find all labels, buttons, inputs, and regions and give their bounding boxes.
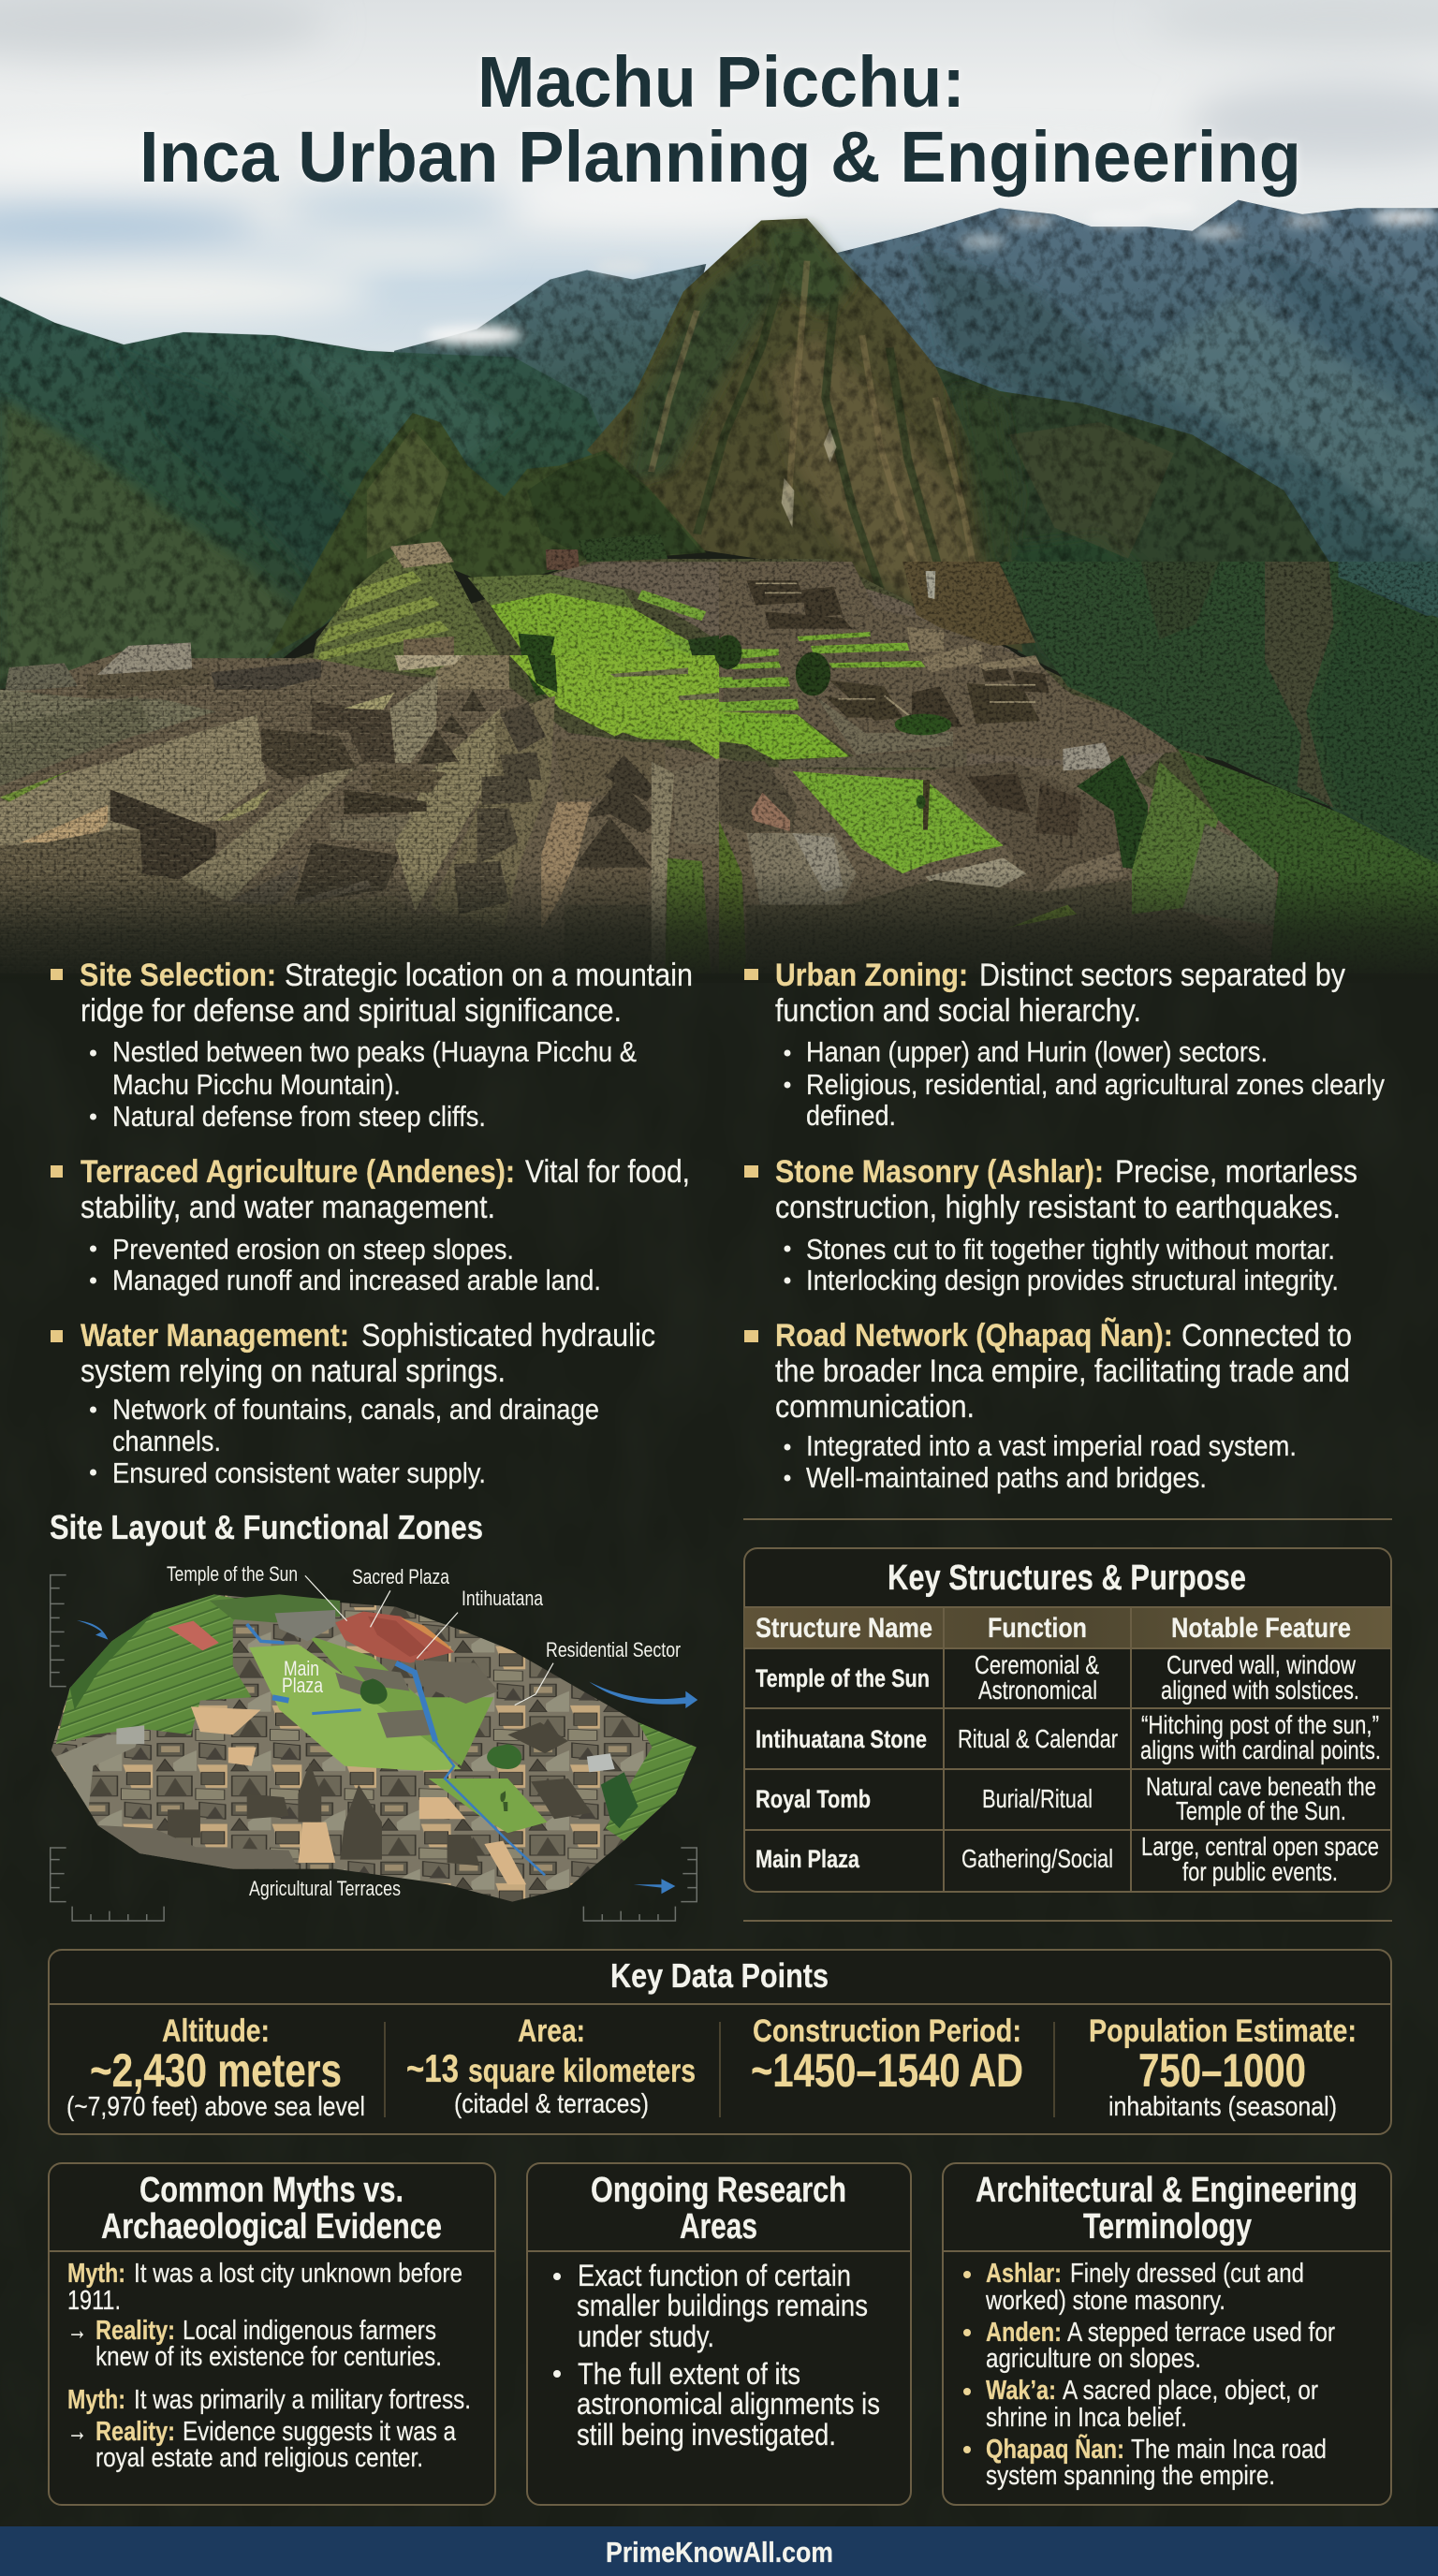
panel: ongoing research areas (527, 2163, 911, 2505)
row: temple of the sun: aligned with solstices. (1161, 1676, 1359, 1705)
research item two (553, 2357, 880, 2452)
point: water management: Network of fountains, canals, and drainage (112, 1393, 599, 1426)
term: waka: shrine in Inca belief. (986, 2403, 1187, 2433)
point: terraced agriculture: Vital for food, (525, 1154, 690, 1190)
point: water management: channels. (112, 1425, 221, 1457)
myth one: Myth: (67, 2259, 125, 2289)
table: key structures and purpose (743, 1519, 1392, 1921)
panel: key data points (49, 1950, 1391, 2134)
point: urban zoning (744, 958, 1385, 1132)
photo fade into dark panel (0, 871, 1438, 983)
site layout map illustration (51, 1562, 697, 1921)
panel: common myths vs archaeological evidence (49, 2163, 495, 2505)
term: anden: A stepped terrace used for (1067, 2318, 1335, 2348)
research item one: smaller buildings remains (577, 2289, 868, 2322)
title (139, 42, 1301, 198)
point: site selection: Natural defense from steep cliffs. (112, 1100, 486, 1133)
term: anden: agriculture on slopes. (986, 2344, 1201, 2374)
term: qhapaq nan: system spanning the empire. (986, 2461, 1275, 2491)
stat: altitude: ~2,430 meters (90, 2044, 342, 2097)
stat: construction period (751, 2013, 1023, 2097)
point: terraced agriculture: Managed runoff and increased arable land. (112, 1264, 601, 1296)
research item two: The full extent of its (578, 2357, 800, 2391)
point: stone masonry: construction, highly resistant to earthquakes. (775, 1190, 1341, 1225)
myth one: It was a lost city unknown before (134, 2259, 462, 2289)
point: urban zoning: Hanan (upper) and Hurin (lower) sectors. (806, 1035, 1268, 1068)
point: road network: the broader Inca empire, facilitating trade and (775, 1354, 1350, 1389)
point: road network: Road Network (Qhapaq Ñan): (775, 1318, 1173, 1354)
point: site selection: Machu Picchu Mountain). (112, 1068, 401, 1101)
point: road network: Connected to (1181, 1318, 1352, 1354)
row: main plaza (756, 1832, 1379, 1886)
term: waka (963, 2376, 1318, 2433)
panel heading (591, 2171, 846, 2247)
myth two (67, 2385, 471, 2473)
point: urban zoning: defined. (806, 1099, 896, 1132)
myth two: Evidence suggests it was a (183, 2417, 457, 2447)
row: main plaza: for public events. (1182, 1857, 1338, 1886)
table title: Key Structures & Purpose (888, 1559, 1246, 1598)
myth two: It was primarily a military fortress. (134, 2385, 471, 2415)
point: water management (51, 1318, 655, 1489)
panel heading: Architectural & Engineering (976, 2171, 1357, 2210)
point: water management: system relying on natural springs. (81, 1354, 506, 1389)
leader lines (305, 1575, 553, 1705)
research item one: Exact function of certain (578, 2259, 851, 2292)
flow arrows (77, 1620, 697, 1894)
panel heading (976, 2171, 1357, 2247)
term: ashlar (963, 2259, 1304, 2316)
point: road network (744, 1318, 1352, 1494)
term: anden (963, 2318, 1335, 2374)
citadel ruins (0, 534, 1438, 973)
water channels (247, 1624, 545, 1875)
point: stone masonry: Stone Masonry (Ashlar): (775, 1154, 1104, 1190)
row: intihuatana stone: aligns with cardinal points. (1140, 1735, 1381, 1764)
panel heading: Common Myths vs. (139, 2171, 404, 2210)
research item two: still being investigated. (577, 2418, 836, 2452)
term: ashlar: worked) stone masonry. (985, 2286, 1225, 2316)
term: ashlar: Finely dressed (cut and (1070, 2259, 1304, 2289)
ridge-top clouds (424, 201, 1438, 344)
myth two: Myth: (67, 2385, 125, 2415)
point: site selection: Strategic location on a mountain (285, 958, 693, 993)
point: terraced agriculture: stability, and water management. (81, 1190, 495, 1225)
table header row: Notable Feature (1171, 1613, 1351, 1644)
stat: population estimate: inhabitants (seasonal) (1108, 2092, 1337, 2122)
map base landform (51, 1594, 697, 1902)
point: urban zoning: function and social hierarchy. (775, 993, 1141, 1029)
table header row (756, 1613, 1351, 1644)
left column: key points (51, 958, 693, 1489)
point: road network: Integrated into a vast imperial road system. (806, 1429, 1297, 1462)
term: qhapaq nan: Qhapaq Ñan: (986, 2433, 1124, 2465)
point: terraced agriculture (51, 1154, 690, 1296)
term: ashlar: Ashlar: (986, 2259, 1062, 2289)
stat: altitude: (~7,970 feet) above sea level (66, 2092, 365, 2122)
stat: altitude (66, 2013, 365, 2122)
row: royal tomb: Natural cave beneath the (1146, 1772, 1376, 1801)
point: stone masonry: Stones cut to fit together tightly without mortar. (806, 1233, 1335, 1266)
row: main plaza: Main Plaza (756, 1845, 860, 1873)
forest and terraces (56, 1594, 697, 1841)
right column: key points (744, 958, 1385, 1494)
myth one: → (67, 2316, 87, 2346)
point: road network: Well-maintained paths and bridges. (806, 1461, 1207, 1494)
table header row: Function (988, 1613, 1087, 1644)
research item two: astronomical alignments is (577, 2387, 880, 2421)
panel title: Key Data Points (610, 1956, 829, 1995)
myth one: Local indigenous farmers (183, 2316, 436, 2346)
stat: area: (citadel & terraces) (454, 2089, 649, 2119)
stat: area: ~13 (406, 2046, 459, 2090)
row: temple of the sun: Ceremonial & (975, 1650, 1099, 1679)
row: royal tomb: Royal Tomb (756, 1785, 871, 1813)
stat: area: square kilometers (468, 2053, 696, 2089)
sky and clouds (0, 0, 1438, 393)
point: urban zoning: Urban Zoning: (775, 958, 968, 993)
scale rulers (51, 1575, 697, 1921)
main plaza (249, 1645, 462, 1771)
upper terraces (307, 1635, 493, 1766)
myth one: 1911. (67, 2286, 121, 2316)
stat: area: Area: (518, 2013, 585, 2049)
point: stone masonry: Precise, mortarless (1115, 1154, 1357, 1190)
row: intihuatana stone: Ritual & Calendar (958, 1724, 1118, 1753)
row: main plaza: Large, central open space (1141, 1832, 1379, 1861)
term: qhapaq nan (963, 2433, 1327, 2491)
panel heading: Ongoing Research (591, 2171, 846, 2210)
table header row: Structure Name (756, 1613, 932, 1644)
footer band: PrimeKnowAll.com (606, 2536, 833, 2569)
stat: construction period: ~1450–1540 AD (751, 2044, 1023, 2097)
point: water management: Ensured consistent water supply. (112, 1456, 486, 1489)
stat: population estimate: 750–1000 (1138, 2044, 1306, 2097)
gullies on the main peak (697, 248, 954, 621)
residential buildings (415, 1660, 498, 1704)
heading: site layout: Site Layout & Functional Zones (50, 1508, 483, 1546)
panel heading: Terminology (1083, 2207, 1252, 2247)
myth two: Reality: (95, 2417, 175, 2447)
point: stone masonry: Interlocking design provides structural integrity. (806, 1264, 1339, 1296)
row: intihuatana stone: Intihuatana Stone (756, 1725, 927, 1753)
map labels: Temple of the Sun (167, 1562, 298, 1586)
point: water management: Water Management: (81, 1318, 349, 1354)
mountains (0, 200, 1438, 894)
myth one: Reality: (95, 2316, 175, 2346)
point: site selection: ridge for defense and spiritual significance. (81, 993, 622, 1029)
myth one (67, 2259, 462, 2372)
myth two: royal estate and religious center. (95, 2443, 423, 2473)
myth two: → (67, 2417, 87, 2447)
row: temple of the sun (756, 1650, 1359, 1705)
title: Inca Urban Planning & Engineering (139, 117, 1301, 198)
point: terraced agriculture: Prevented erosion on steep slopes. (112, 1233, 514, 1266)
point: site selection: Nestled between two peaks (Huayna Picchu & (112, 1035, 637, 1068)
panel heading: Archaeological Evidence (101, 2207, 442, 2247)
point: site selection (51, 958, 693, 1133)
map labels: Sacred Plaza (352, 1565, 450, 1588)
term: anden: Anden: (986, 2318, 1062, 2348)
term: waka: Wak’a: (986, 2376, 1056, 2406)
point: stone masonry (744, 1154, 1357, 1296)
stat: population estimate: Population Estimate: (1089, 2013, 1357, 2049)
row: temple of the sun: Curved wall, window (1167, 1650, 1357, 1679)
footer band (0, 2526, 1438, 2576)
point: site selection: Site Selection: (80, 958, 276, 993)
point: urban zoning: Distinct sectors separated by (979, 958, 1345, 993)
map labels: Agricultural Terraces (249, 1877, 401, 1900)
point: terraced agriculture: Terraced Agriculture (Andenes): (81, 1154, 515, 1190)
row: royal tomb: Temple of the Sun. (1176, 1796, 1346, 1825)
map labels: Plaza (282, 1674, 324, 1697)
panel: architectural and engineering terminology (943, 2163, 1391, 2505)
myth one: knew of its existence for centuries. (95, 2342, 442, 2372)
title: Machu Picchu: (477, 42, 965, 123)
map labels: Residential Sector (546, 1638, 681, 1661)
panel heading: Areas (680, 2207, 757, 2247)
row: royal tomb (756, 1772, 1376, 1825)
term: waka: A sacred place, object, or (1063, 2376, 1318, 2406)
row: intihuatana stone: “Hitching post of the sun,” (1141, 1710, 1379, 1739)
row: temple of the sun: Temple of the Sun (756, 1664, 930, 1692)
research item one: under study. (578, 2320, 714, 2353)
row: temple of the sun: Astronomical (978, 1676, 1097, 1705)
stat: construction period: Construction Period: (753, 2013, 1021, 2049)
hero photo: Machu Picchu citadel and Huayna Picchu (0, 0, 1438, 983)
stat: area (406, 2013, 696, 2119)
term: qhapaq nan: The main Inca road (1131, 2435, 1327, 2465)
row: royal tomb: Burial/Ritual (982, 1784, 1093, 1813)
panel heading (101, 2171, 442, 2247)
map labels: Main (284, 1657, 319, 1680)
point: water management: Sophisticated hydraulic (361, 1318, 655, 1354)
row: intihuatana stone (756, 1710, 1381, 1764)
stat: altitude: Altitude: (162, 2013, 270, 2049)
point: road network: communication. (775, 1389, 975, 1425)
temple zone in red (335, 1612, 454, 1663)
row: main plaza: Gathering/Social (961, 1844, 1113, 1873)
lower lawn (429, 1778, 548, 1833)
stat: population estimate (1089, 2013, 1357, 2122)
map labels: Intihuatana (462, 1587, 544, 1610)
map labels (167, 1562, 681, 1900)
research item one (553, 2259, 868, 2353)
